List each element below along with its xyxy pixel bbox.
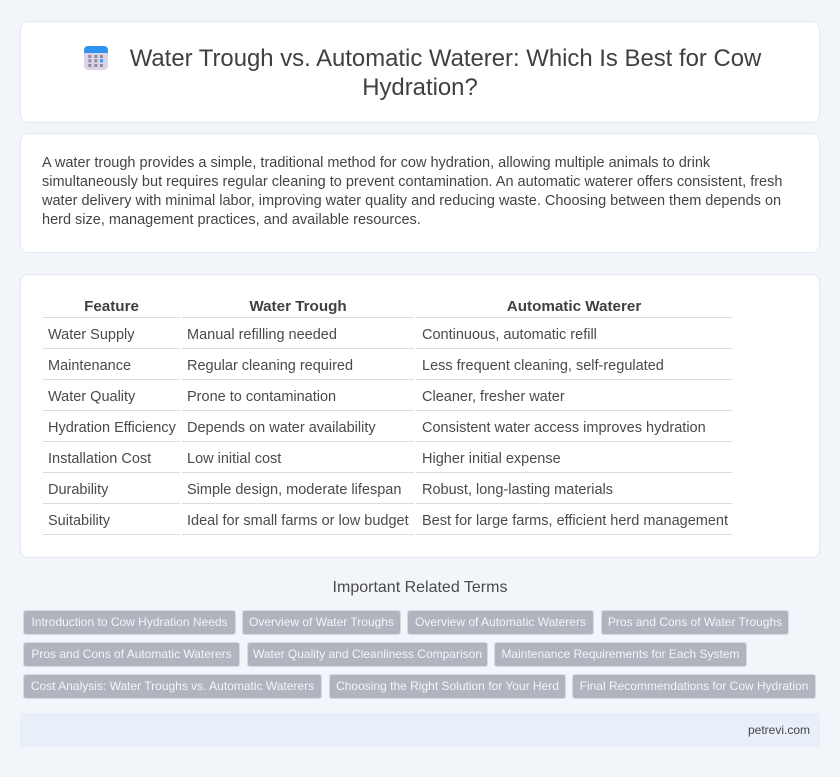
row: water quality bbox=[48, 389, 565, 405]
row: installation cost: Installation Cost bbox=[48, 451, 151, 467]
related term tags: Choosing the Right Solution for Your Herd bbox=[336, 679, 559, 693]
intro paragraph: A water trough provides a simple, traditional method for cow hydration, allowing multiple animals to drink bbox=[42, 155, 710, 171]
row: durability bbox=[48, 482, 613, 498]
row: maintenance: Maintenance bbox=[48, 358, 131, 374]
row: water supply: Water Supply bbox=[48, 327, 134, 343]
row: installation cost: Higher initial expense bbox=[422, 451, 561, 467]
related term tags: Maintenance Requirements for Each System bbox=[501, 647, 740, 661]
row: maintenance: Regular cleaning required bbox=[187, 358, 353, 374]
row: maintenance bbox=[48, 358, 664, 374]
intro paragraph bbox=[42, 155, 782, 228]
intro paragraph: herd size, management practices, and available resources. bbox=[42, 212, 421, 228]
table header bbox=[84, 298, 642, 315]
related term tags: Introduction to Cow Hydration Needs bbox=[31, 615, 228, 629]
icon: calendar bbox=[84, 46, 108, 70]
row: hydration efficiency: Depends on water availability bbox=[187, 420, 376, 436]
row: durability: Robust, long-lasting materials bbox=[422, 482, 613, 498]
related term tags: Overview of Water Troughs bbox=[249, 615, 394, 629]
row: durability: Durability bbox=[48, 482, 108, 498]
row: maintenance: Less frequent cleaning, self-regulated bbox=[422, 358, 664, 374]
related term tags: Final Recommendations for Cow Hydration bbox=[580, 679, 808, 693]
row: suitability: Suitability bbox=[48, 513, 110, 529]
row: water supply bbox=[48, 327, 597, 343]
table header: Water Trough bbox=[249, 298, 347, 315]
row: suitability: Ideal for small farms or low budget bbox=[187, 513, 409, 529]
row: hydration efficiency: Consistent water access improves hydration bbox=[422, 420, 706, 436]
related term tags: Water Quality and Cleanliness Comparison bbox=[253, 647, 482, 661]
row: water supply: Continuous, automatic refill bbox=[422, 327, 597, 343]
table header: Automatic Waterer bbox=[507, 298, 641, 315]
related term tags: Overview of Automatic Waterers bbox=[415, 615, 586, 629]
row: hydration efficiency: Hydration Efficiency bbox=[48, 420, 176, 436]
title bbox=[130, 45, 762, 101]
related term tags: Cost Analysis: Water Troughs vs. Automatic Waterers bbox=[31, 679, 314, 693]
row: water supply: Manual refilling needed bbox=[187, 327, 337, 343]
panel: header bbox=[20, 21, 820, 123]
row: installation cost bbox=[48, 451, 561, 467]
intro paragraph: simultaneously but requires regular cleaning to prevent contamination. An automatic waterer offers consistent, fresh bbox=[42, 174, 782, 190]
row: durability: Simple design, moderate lifespan bbox=[187, 482, 401, 498]
panel: comparison table bbox=[20, 274, 820, 558]
table header: Feature bbox=[84, 298, 139, 315]
footer source: petrevi.com bbox=[748, 723, 810, 737]
title: Water Trough vs. Automatic Waterer: Which Is Best for Cow bbox=[130, 45, 761, 72]
row: hydration efficiency bbox=[48, 420, 706, 436]
row: installation cost: Low initial cost bbox=[187, 451, 281, 467]
row: water quality: Cleaner, fresher water bbox=[422, 389, 565, 405]
panel: introduction bbox=[20, 133, 820, 253]
row: water quality: Prone to contamination bbox=[187, 389, 336, 405]
row: suitability bbox=[48, 513, 728, 529]
row: water quality: Water Quality bbox=[48, 389, 135, 405]
footer bar bbox=[20, 713, 820, 747]
row: suitability: Best for large farms, efficient herd management bbox=[422, 513, 728, 529]
related term tags bbox=[23, 610, 816, 699]
title: Hydration? bbox=[362, 74, 478, 101]
intro paragraph: water delivery with minimal labor, improving water quality and reducing waste. Choosing between them depends on bbox=[42, 193, 781, 209]
heading: related terms: Important Related Terms bbox=[333, 579, 507, 596]
related term tags: Pros and Cons of Automatic Waterers bbox=[31, 647, 232, 661]
related term tags: Pros and Cons of Water Troughs bbox=[608, 615, 782, 629]
